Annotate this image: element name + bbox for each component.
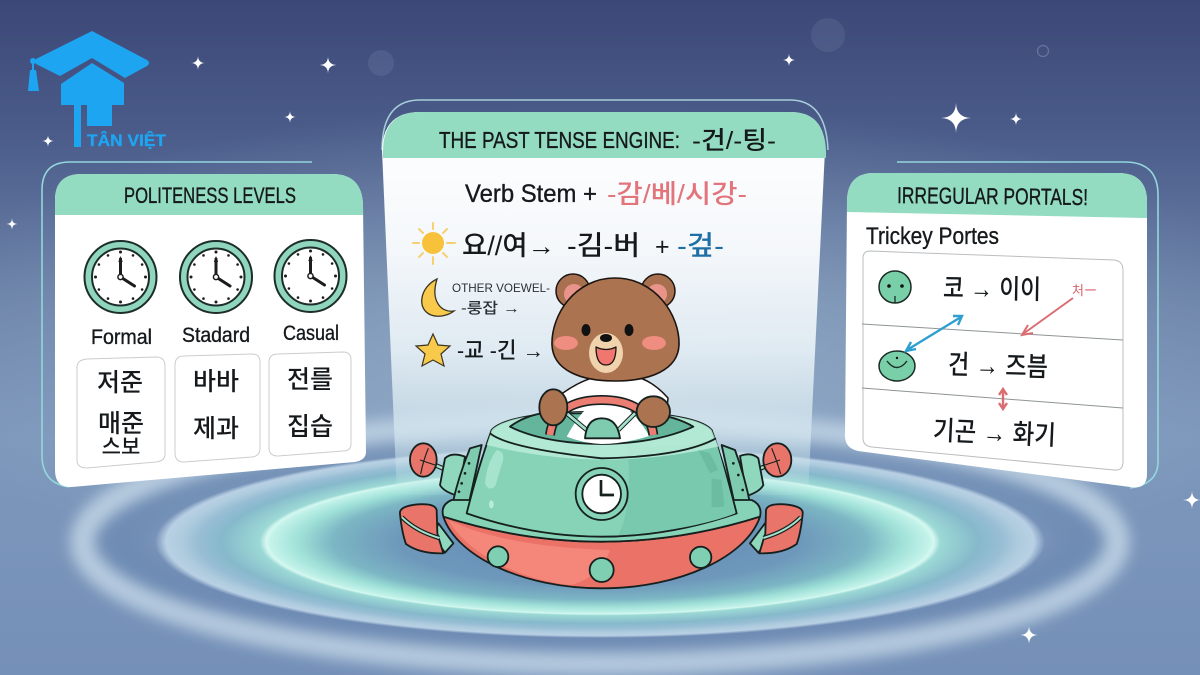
icon: logo post (74, 100, 81, 147)
bear muzzle (589, 333, 623, 373)
clock: formal (84, 241, 156, 313)
clock: standard (180, 241, 252, 313)
logo: Tan Viet (34, 31, 149, 78)
card: casual words: 집습 (287, 413, 333, 441)
dome shade (618, 438, 735, 535)
card: casual words (269, 352, 351, 456)
bear nose (600, 334, 612, 342)
dome rim (487, 412, 718, 460)
card: casual words: 전를 (287, 366, 333, 394)
rule: other vowels: OTHER VOEWEL- (452, 281, 550, 295)
label: standard: Stadard (182, 324, 250, 347)
formula: endings: -감/베/시강- (607, 179, 747, 209)
label: red note: 처ー (1072, 283, 1097, 298)
left side plate (453, 445, 482, 513)
wheel base (567, 413, 635, 438)
right knob (757, 443, 791, 477)
table: irregular rows (862, 251, 1123, 470)
spaceship (400, 389, 803, 588)
left knob (410, 443, 447, 477)
arrow: red vertical (999, 389, 1007, 409)
card: standard words (175, 354, 260, 462)
icon: green face two (879, 351, 915, 381)
arrow: blue double (906, 316, 962, 351)
bear cheeks (554, 336, 666, 350)
band (443, 500, 761, 542)
hull (443, 517, 760, 588)
arrow: red diagonal (1022, 298, 1073, 335)
icon: sun (413, 223, 455, 264)
icon: star (416, 334, 450, 366)
dome (467, 412, 737, 537)
heading: irregular portals: IRREGULAR PORTALS! (897, 182, 1088, 210)
bear hands (539, 389, 670, 427)
label: formal: Formal (91, 326, 152, 349)
heading: suffix: -건/-팅- (692, 127, 776, 155)
icon: green face one (879, 271, 911, 303)
rivets (457, 462, 745, 503)
text: row three: 기곤 → 화기 (932, 416, 1057, 451)
bear right ear (641, 274, 675, 308)
dome highlights (485, 450, 724, 508)
ripple portal (82, 420, 1118, 664)
formula: verb stem: Verb Stem + (465, 180, 597, 208)
card: formal words: 매준 (98, 410, 144, 438)
icon: tassel (28, 58, 39, 91)
bear left ear (556, 274, 590, 308)
rule: blue suffix: -겊- (677, 231, 724, 261)
label: casual: Casual (283, 322, 339, 345)
cockpit interior (567, 400, 649, 444)
card: standard words: 바바 (193, 368, 239, 396)
bear head (552, 278, 679, 381)
rule: bright result: -김-버 (567, 231, 640, 261)
card: formal words: 스보 (102, 436, 140, 459)
card: formal words (77, 357, 165, 468)
rule: bright vowels: 요//여→ (462, 231, 555, 261)
cockpit (510, 413, 693, 444)
subheading: tricky portals: Trickey Portes (866, 223, 999, 250)
steering wheel (550, 400, 653, 435)
left fin (400, 504, 453, 553)
panel: past tense engine (382, 100, 828, 495)
heading: politeness levels: POLITENESS LEVELS (124, 183, 296, 208)
character: bear pilot (552, 274, 679, 440)
bear mouth (596, 347, 616, 365)
icon: graduation cap (34, 31, 149, 78)
logo wordmark: TÂN VIỆT (87, 131, 167, 150)
left pod (440, 455, 465, 496)
card: formal words: 저준 (97, 369, 143, 397)
clock: casual (274, 240, 346, 312)
icon: arrow (61, 63, 124, 126)
right pod (740, 454, 763, 496)
text: row one: 코 → 이이 (943, 273, 1041, 305)
hull highlight (448, 520, 610, 585)
icon: moon (422, 279, 454, 316)
rule: other result: -룽잡 → (461, 300, 520, 317)
text: row two: 건 → 즈븜 (948, 350, 1048, 382)
right side plate (722, 445, 751, 513)
panel: irregular portals (845, 162, 1158, 488)
heading: past tense engine: THE PAST TENSE ENGINE: (439, 127, 680, 153)
hull portholes (488, 546, 711, 582)
rule: plus: + (655, 233, 670, 261)
card: standard words: 제과 (193, 415, 239, 443)
dome clock (576, 468, 628, 520)
bear eyes (582, 324, 634, 336)
right fin (750, 504, 803, 553)
bear body (552, 375, 668, 440)
rule: star result: -교 -긴 → (457, 338, 544, 363)
panel: politeness levels (42, 162, 366, 487)
